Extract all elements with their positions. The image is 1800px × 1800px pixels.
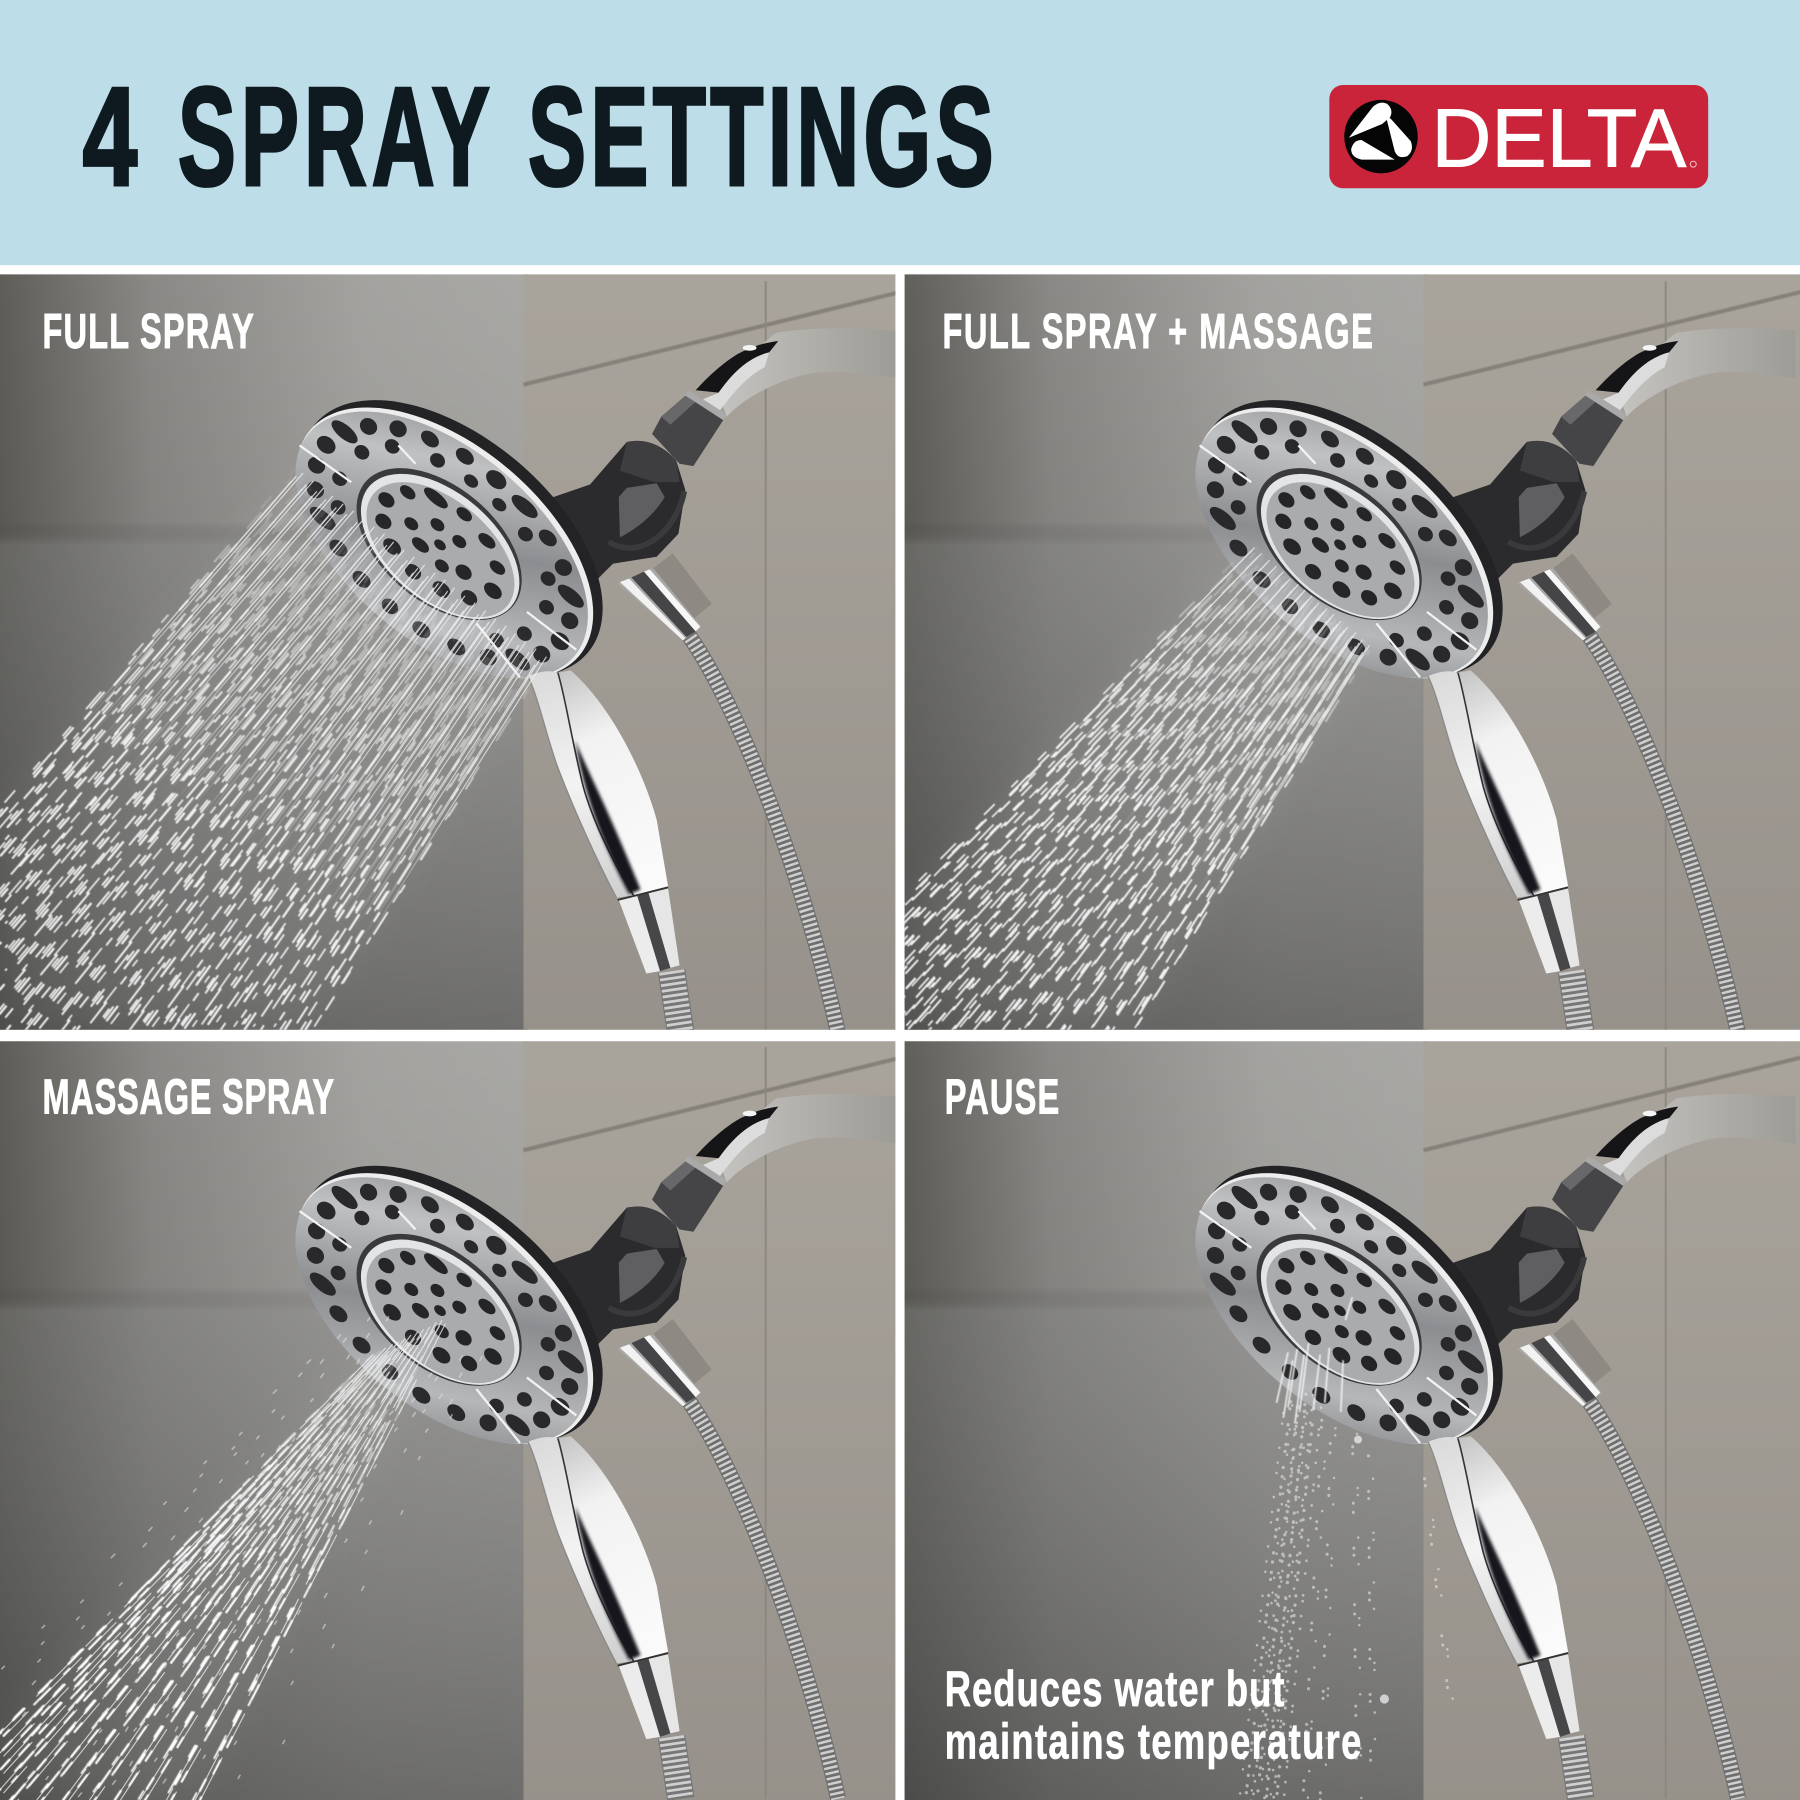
header band	[0, 0, 1800, 265]
label: massage spray: MASSAGE SPRAY	[42, 1069, 334, 1124]
title	[83, 59, 994, 215]
title: SETTINGS	[528, 59, 994, 215]
panel: full spray	[0, 264, 914, 1045]
panel: pause	[889, 1030, 1800, 1800]
water spray: full + massage	[897, 546, 1372, 1033]
label: full spray: FULL SPRAY	[42, 303, 254, 358]
panel: massage spray	[0, 1030, 914, 1800]
panel: full spray + massage	[889, 264, 1800, 1045]
text block: pause note	[945, 1661, 1361, 1770]
water spray: massage	[0, 1306, 492, 1800]
water drips: pause	[1239, 1297, 1453, 1800]
text block: pause note: maintains temperature	[945, 1714, 1361, 1770]
label: full spray + massage: FULL SPRAY + MASSAGE	[942, 303, 1373, 358]
logo: Delta	[1329, 85, 1708, 188]
water spray: full	[0, 471, 549, 1034]
logo: Delta: DELTA	[1432, 91, 1686, 184]
label: pause: PAUSE	[945, 1069, 1059, 1124]
title: 4	[83, 59, 137, 215]
text block: pause note: Reduces water but	[945, 1661, 1285, 1717]
title: SPRAY	[178, 59, 490, 215]
